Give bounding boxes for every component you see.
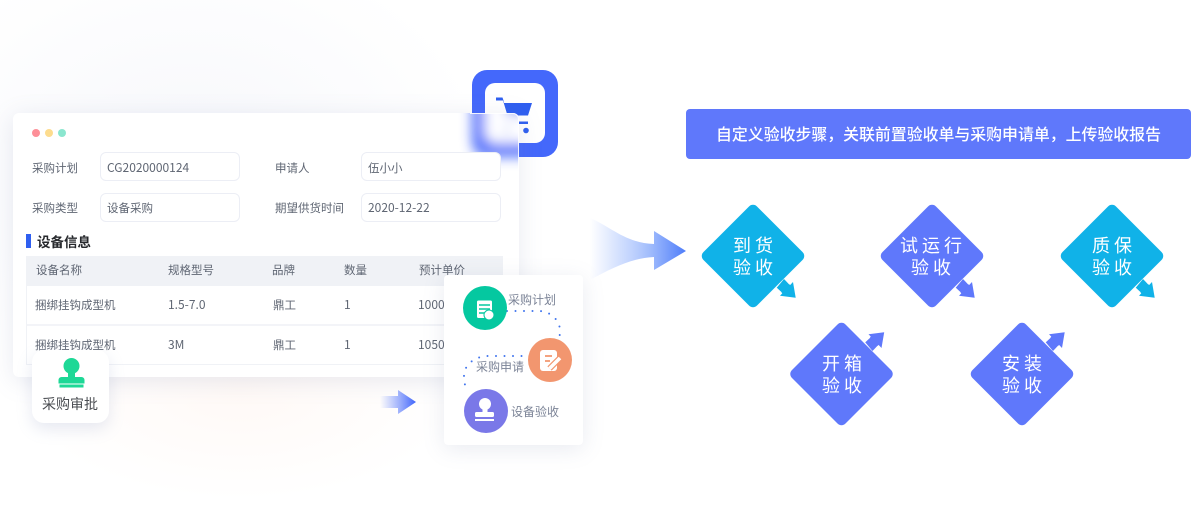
form fields: 申请人	[275, 160, 310, 176]
label: unboxing: 验收	[822, 372, 866, 398]
label: unboxing: 开箱	[822, 350, 866, 376]
label: arrival: 到货	[733, 232, 777, 258]
arrow: small gradient	[382, 390, 416, 414]
form fields	[32, 152, 501, 222]
label: arrival: 验收	[733, 254, 777, 280]
window control dots	[32, 129, 66, 137]
step diagram	[463, 286, 572, 433]
heading: equipment info: 设备信息	[37, 231, 91, 251]
step: unboxing	[790, 323, 893, 425]
panel: process steps: 采购申请	[476, 358, 524, 375]
form fields: 采购计划	[32, 160, 78, 176]
banner	[686, 109, 1191, 159]
label: unboxing	[822, 350, 866, 398]
panel: process steps: 设备验收	[511, 403, 559, 420]
step: installation	[971, 323, 1073, 425]
table: equipment list: 1000	[418, 296, 445, 313]
label: warranty: 验收	[1092, 254, 1136, 280]
frosted glass blur of cart icon	[462, 113, 519, 166]
panel: process steps	[444, 275, 583, 445]
label: installation	[1002, 350, 1046, 398]
table: equipment list: 捆绑挂钩成型机	[35, 337, 116, 353]
panel: purchase form window	[13, 113, 519, 377]
form fields: 采购类型	[32, 200, 78, 216]
window edge highlight	[470, 113, 519, 173]
table: equipment list: 1.5-7.0	[168, 296, 205, 313]
banner: 自定义验收步骤，关联前置验收单与采购申请单，上传验收报告	[716, 122, 1161, 145]
table: equipment list: 1	[344, 296, 351, 313]
form fields: 设备采购	[107, 200, 153, 216]
label: trial run: 验收	[911, 254, 955, 280]
icon: request	[528, 338, 572, 382]
card: purchase approval	[32, 350, 109, 423]
table: equipment list: 3M	[168, 336, 184, 353]
table: equipment list: 预计单价	[419, 262, 465, 278]
table: equipment list: 品牌	[272, 262, 295, 278]
form fields: 2020-12-22	[368, 199, 430, 216]
step: warranty	[1061, 205, 1163, 307]
step: trial run	[881, 205, 983, 307]
panel: process steps: 采购计划	[508, 291, 556, 308]
label: warranty: 质保	[1092, 232, 1136, 258]
arrow: large gradient	[596, 221, 686, 276]
icon: green stamp	[58, 358, 84, 388]
label: arrival	[733, 232, 777, 280]
form fields: 期望供货时间	[275, 200, 344, 216]
table: equipment list: 数量	[344, 262, 367, 278]
icon: acceptance	[464, 389, 508, 433]
label: installation: 验收	[1002, 372, 1046, 398]
icon: plan	[463, 286, 507, 330]
card: purchase approval: 采购审批	[42, 394, 98, 414]
label: warranty	[1092, 232, 1136, 280]
table: equipment list: 规格型号	[168, 262, 214, 278]
label: installation: 安装	[1002, 350, 1046, 376]
label: trial run: 试运行	[900, 232, 966, 258]
form fields: 伍小小	[368, 160, 402, 176]
step: arrival	[702, 205, 804, 307]
table: equipment list	[26, 256, 503, 365]
table: equipment list: 鼎工	[273, 337, 296, 353]
label: trial run	[900, 232, 966, 280]
table: equipment list: 鼎工	[273, 297, 296, 313]
table: equipment list: 1	[344, 336, 351, 353]
table: equipment list: 设备名称	[36, 262, 82, 278]
table: equipment list: 捆绑挂钩成型机	[35, 297, 116, 313]
table: equipment list: 1050	[418, 336, 445, 353]
form fields: CG2020000124	[107, 159, 189, 176]
